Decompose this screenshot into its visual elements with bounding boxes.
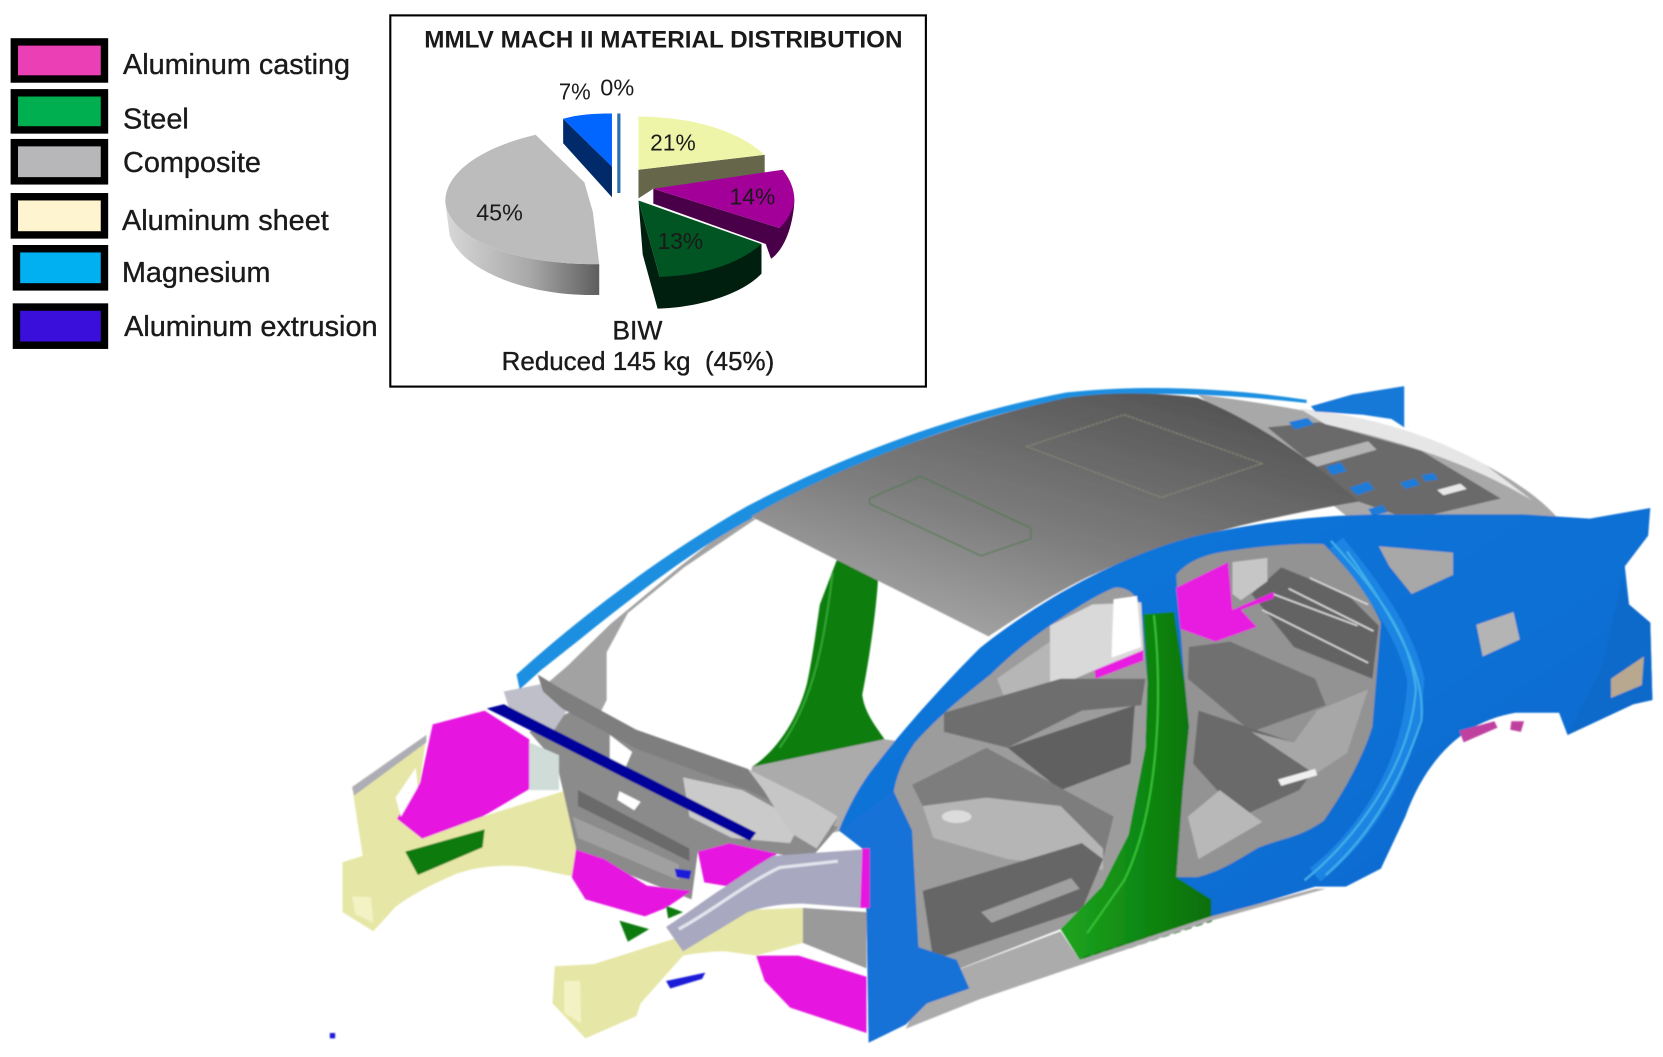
side sill [906,889,1326,1029]
far side B-pillar in steel [752,560,885,769]
rear lower cutout [1611,657,1644,698]
legend item: composite: Composite [123,147,261,179]
pie slice: steel 13%: 13% [658,228,703,254]
opening in left apron [396,768,418,817]
magenta strip by hinge pillar [860,848,870,908]
legend item: aluminum casting [14,42,350,81]
magenta cross member in front door [1095,650,1143,679]
chart caption [502,315,774,376]
rear quarter frame highlight [1315,543,1416,875]
dash top [748,739,914,838]
crease on tail [1568,578,1652,735]
underbody parts at rear wheel arch [1459,721,1524,742]
right rail front tip [564,981,581,1023]
rear door opening interior [1176,544,1381,877]
magenta casting under engine bay [572,850,692,916]
legend item: aluminum sheet [14,197,329,237]
fender rail [666,850,862,951]
pie slice: aluminum sheet 21% [638,117,765,198]
far side A-pillar [538,518,756,725]
front door opening interior [893,588,1148,981]
pie slice: magnesium 7% [559,79,612,197]
legend [14,42,378,345]
legend item: aluminum extrusion: Aluminum extrusion [124,311,378,343]
legend item: magnesium [16,249,270,289]
aluminum extrusion strut brace [487,704,756,841]
legend item: steel: Steel [123,103,189,135]
pie slice: steel 13% [638,200,762,309]
fuel door opening [1476,612,1520,657]
left shock tower casting [397,711,529,839]
composite roof panel [751,393,1359,636]
panel: material distribution pie chart [390,15,926,387]
left rail upper edge [352,735,426,795]
rear door frame highlights [1305,541,1422,880]
rear deck [1197,395,1559,520]
pie slice: aluminum sheet 21%: 21% [650,130,696,156]
legend item: aluminum casting: Aluminum casting [123,49,350,81]
pie slice: aluminum extrusion 0%: 0% [600,74,634,100]
right front rail [553,908,803,1038]
car body in white illustration [330,386,1652,1043]
pie slice: composite 45%: 45% [476,200,523,226]
blue rear spoiler top [1311,386,1404,427]
legend item: composite [14,143,261,181]
pie slice: composite 45% [445,135,599,295]
green bracket on left rail [405,829,485,875]
pie slice: aluminum casting 14%: 14% [730,184,775,210]
legend item: aluminum sheet: Aluminum sheet [122,205,329,237]
gray panel behind right rail [803,908,866,968]
engine bay and firewall [504,675,838,899]
legend item: steel [14,93,189,135]
chart title: MMLV MACH II MATERIAL DISTRIBUTION [424,27,903,54]
left rail front tip [352,896,373,923]
magnesium windshield header strip [517,388,1307,689]
legend item: magnesium: Magnesium [122,257,270,289]
front hinge pillar [839,790,969,1043]
blue side frame [839,508,1652,1043]
chart caption: Reduced 145 kg (45%) [502,348,774,376]
pie slice: magnesium 7%: 7% [559,79,591,105]
blue small hardware [330,869,705,1038]
pie slice: aluminum casting 14% [653,170,794,259]
green brackets near right rail [619,906,683,942]
quarter window [1379,546,1453,594]
left front rail [343,735,576,931]
right shock tower casting [698,843,777,887]
chart caption: BIW [612,315,662,345]
pie slice: aluminum extrusion 0% [600,74,634,193]
near side B-pillar in steel [1061,612,1211,960]
magenta casting in rear door [1176,562,1274,642]
lower magenta casting [756,956,866,1033]
legend item: aluminum extrusion [16,307,378,345]
